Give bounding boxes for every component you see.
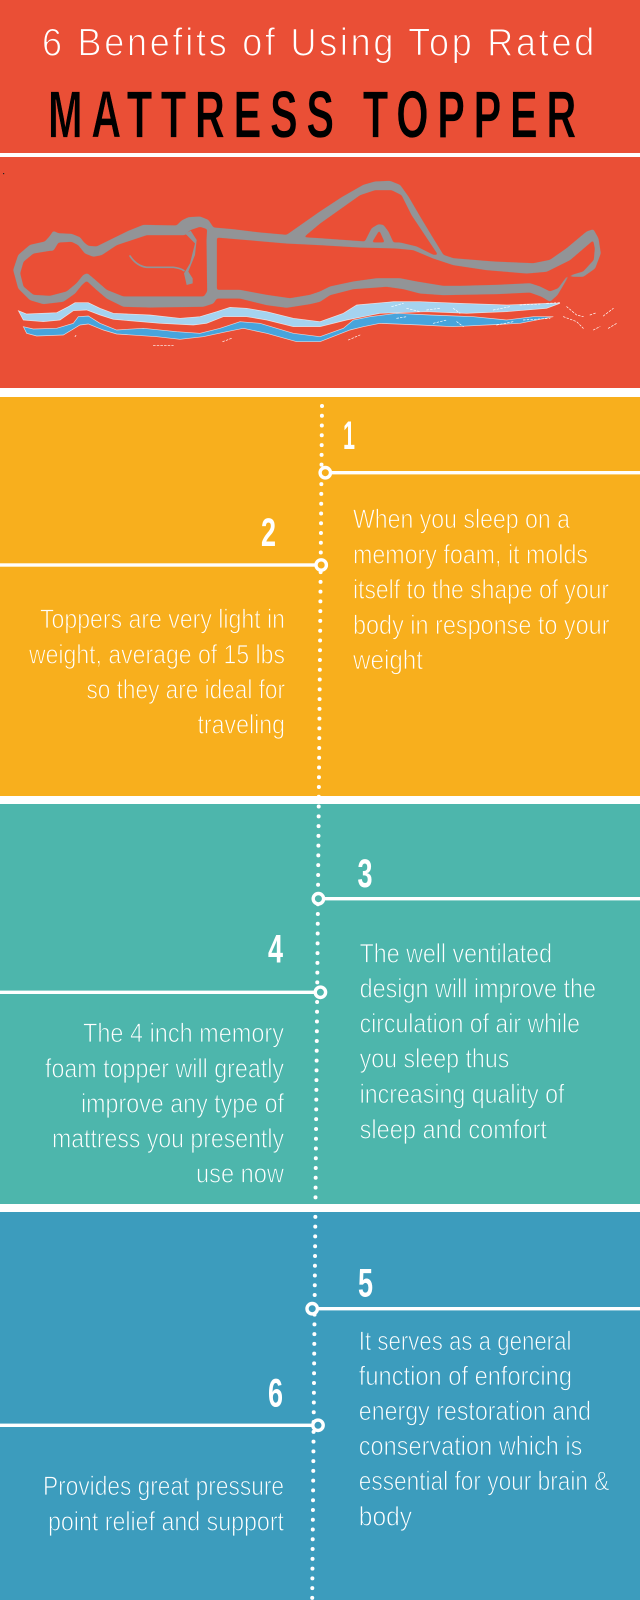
text: benefit 1: weight bbox=[352, 645, 423, 675]
text: benefit 5: energy restoration and bbox=[359, 1396, 591, 1426]
dotted timeline bbox=[312, 406, 322, 1600]
illustration: person on memory foam bbox=[13, 181, 617, 345]
text: benefit 2: traveling bbox=[198, 709, 285, 739]
text: benefit 3 bbox=[360, 938, 596, 1144]
number 6: 6 bbox=[268, 1372, 283, 1416]
number 1: 1 bbox=[343, 414, 355, 458]
number 5: 5 bbox=[358, 1262, 373, 1306]
text: benefit 3: sleep and comfort bbox=[360, 1114, 547, 1144]
foam speckles bbox=[75, 303, 617, 345]
text: benefit 2 bbox=[28, 604, 285, 739]
text: benefit 5: conservation which is bbox=[359, 1431, 582, 1461]
text: benefit 5 bbox=[359, 1326, 609, 1531]
text: benefit 1 bbox=[352, 504, 610, 675]
title: subtitle line: 6 Benefits of Using Top Rated bbox=[42, 22, 597, 65]
dark foam layer bbox=[23, 313, 553, 342]
text: benefit 3: The well ventilated bbox=[360, 938, 552, 968]
text: benefit 4: foam topper will greatly bbox=[45, 1053, 284, 1083]
panel: blue benefits 5 and 6 bbox=[0, 1212, 640, 1600]
text: benefit 2: so they are ideal for bbox=[86, 674, 285, 704]
text: benefit 4 bbox=[45, 1018, 284, 1189]
panel: sleeper illustration bbox=[0, 157, 640, 388]
text: benefit 1: body in response to your bbox=[353, 610, 610, 640]
number 3: 3 bbox=[358, 852, 372, 896]
marker: benefit 6 connector bbox=[0, 1420, 323, 1431]
text: benefit 2: Toppers are very light in bbox=[40, 604, 285, 634]
number 4: 4 bbox=[268, 928, 284, 972]
text: benefit 3: increasing quality of bbox=[360, 1079, 565, 1109]
marker: benefit 3 connector bbox=[313, 894, 640, 904]
marker: benefit 4 connector bbox=[0, 987, 326, 998]
text: benefit 4: use now bbox=[196, 1159, 284, 1189]
text: benefit 1: memory foam, it molds bbox=[353, 539, 588, 569]
text: benefit 6: point relief and support bbox=[48, 1506, 284, 1536]
text: benefit 6: Provides great pressure bbox=[43, 1471, 284, 1501]
marker: benefit 5 connector bbox=[307, 1304, 640, 1314]
number 2: 2 bbox=[261, 511, 276, 555]
text: benefit 5: function of enforcing bbox=[359, 1361, 572, 1391]
text: benefit 4: mattress you presently bbox=[52, 1124, 284, 1154]
light foam layer bbox=[18, 302, 560, 327]
text: benefit 3: design will improve the bbox=[360, 974, 596, 1004]
body outline bbox=[13, 181, 601, 308]
text: benefit 4: The 4 inch memory bbox=[83, 1018, 284, 1048]
text: benefit 6 bbox=[43, 1471, 284, 1536]
text: benefit 1: When you sleep on a bbox=[353, 504, 571, 534]
text: benefit 5: It serves as a general bbox=[359, 1326, 571, 1356]
panel: orange benefits 1 and 2 bbox=[0, 397, 640, 796]
panel: teal benefits 3 and 4 bbox=[0, 804, 640, 1204]
panel: header bbox=[0, 0, 640, 153]
text: benefit 2: weight, average of 15 lbs bbox=[28, 639, 285, 669]
marker: benefit 2 connector bbox=[0, 560, 326, 570]
text: benefit 3: you sleep thus bbox=[360, 1044, 509, 1074]
arm bbox=[184, 231, 197, 285]
text: benefit 4: improve any type of bbox=[81, 1089, 284, 1119]
hand line bbox=[130, 256, 184, 271]
text: benefit 5: body bbox=[359, 1501, 412, 1531]
text: benefit 3: circulation of air while bbox=[360, 1009, 580, 1039]
marker: benefit 1 connector bbox=[320, 468, 640, 478]
